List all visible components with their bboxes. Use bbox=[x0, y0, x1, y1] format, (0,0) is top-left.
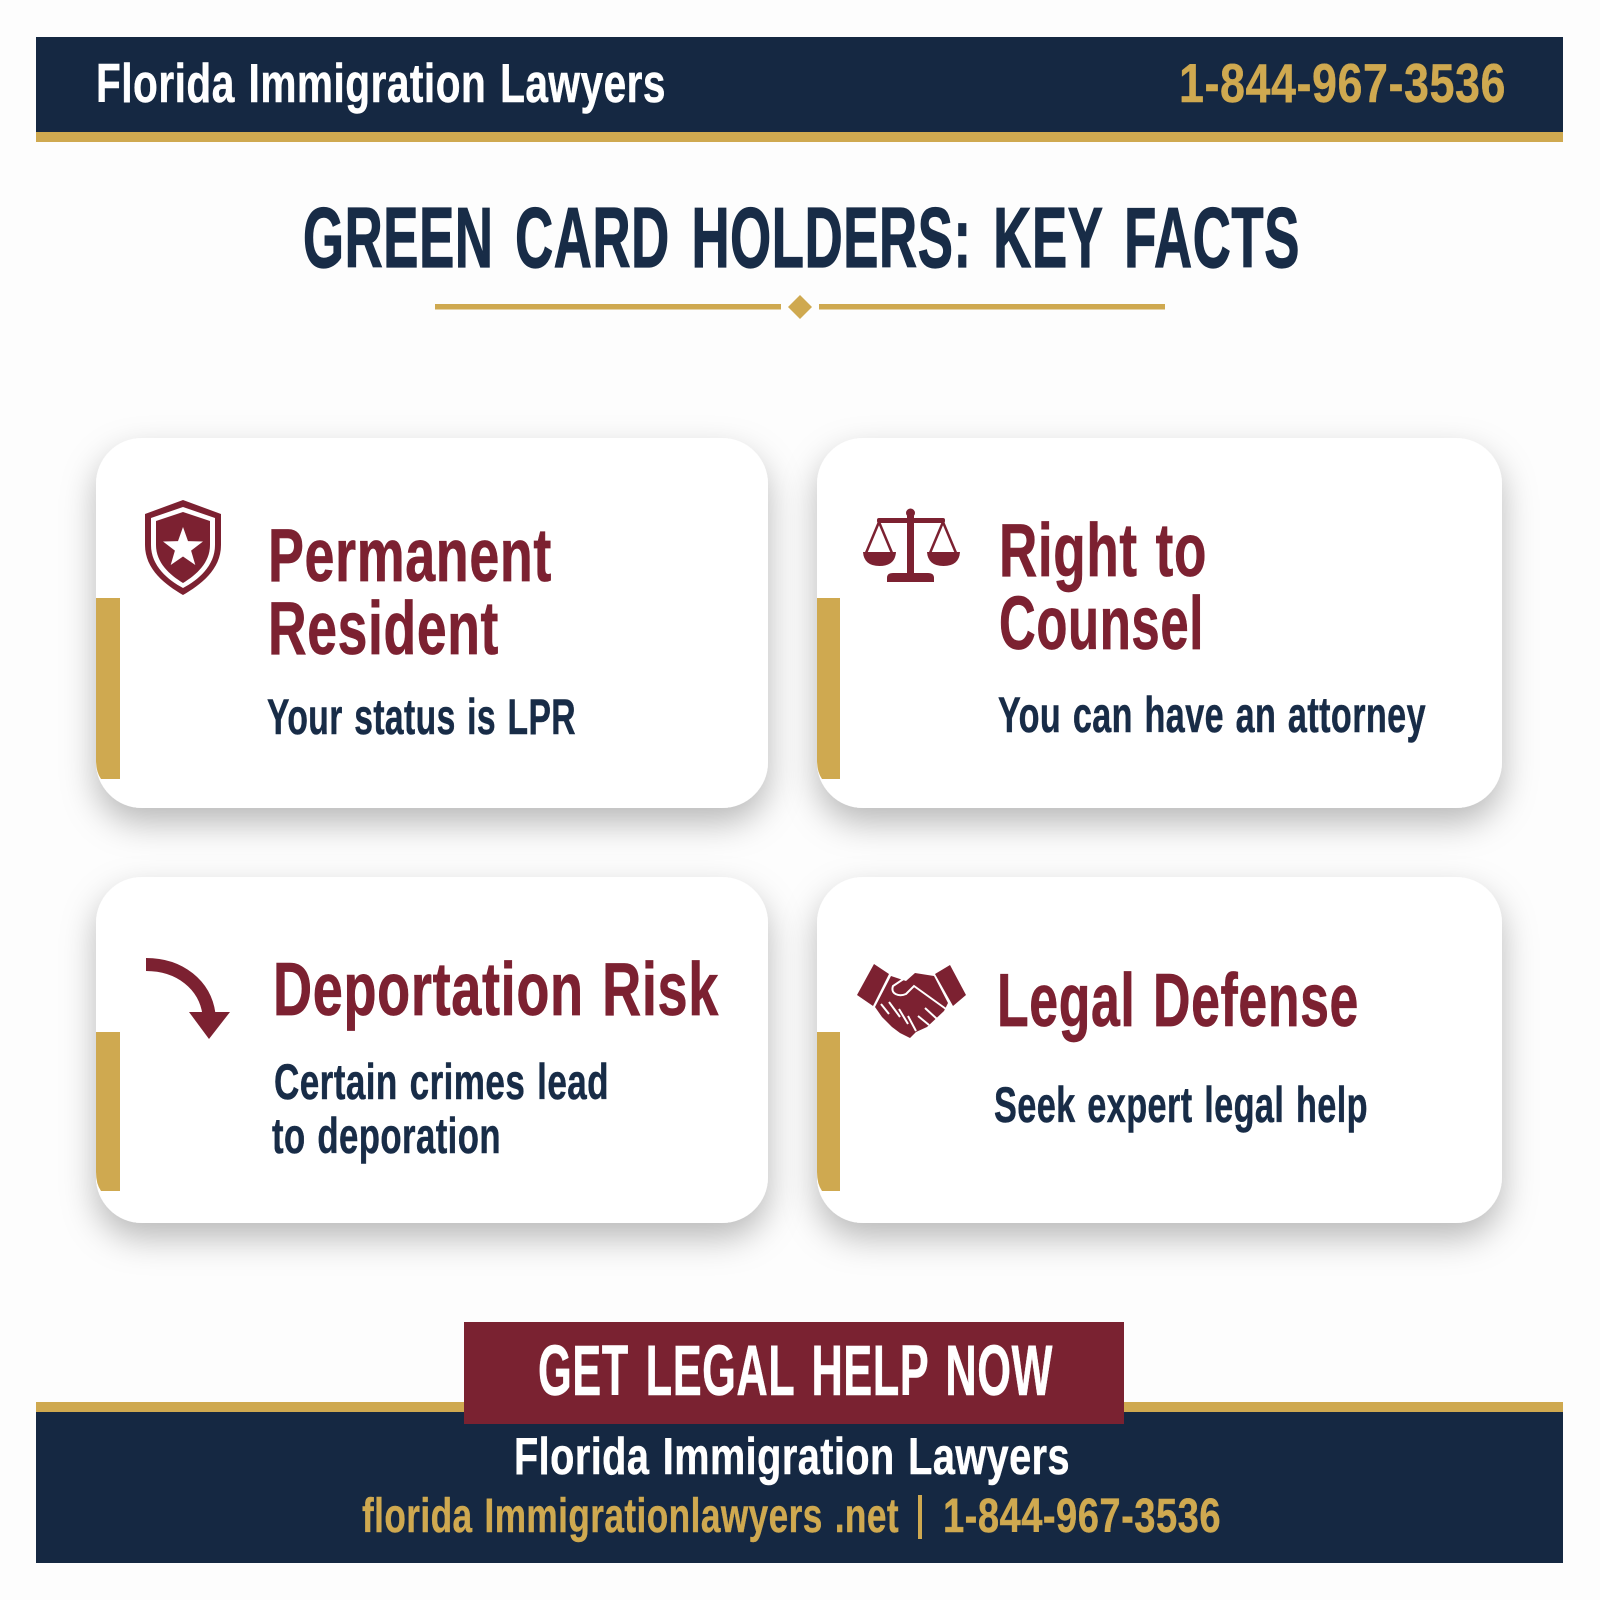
call to action bbox=[464, 1322, 1124, 1424]
footer firm name: Florida Immigration Lawyers bbox=[514, 1428, 1070, 1486]
header banner bbox=[36, 37, 1563, 142]
description: Seek expert legal help bbox=[994, 1077, 1368, 1133]
description: Your status is LPR bbox=[267, 689, 576, 745]
panel: permanent resident bbox=[96, 438, 768, 808]
panel: right to counsel bbox=[817, 438, 1502, 808]
footer banner bbox=[36, 1402, 1563, 1563]
description: to deporation bbox=[272, 1108, 501, 1164]
description: Certain crimes lead bbox=[274, 1054, 609, 1110]
firm name: Florida Immigration Lawyers bbox=[96, 52, 666, 114]
icon: scales of justice bbox=[863, 508, 960, 582]
heading: Deportation Risk bbox=[273, 947, 719, 1031]
heading: Legal Defense bbox=[997, 958, 1359, 1042]
heading: Permanent bbox=[268, 513, 552, 597]
heading: Right to bbox=[999, 508, 1207, 592]
panel: legal defense bbox=[817, 877, 1502, 1223]
title divider bbox=[435, 295, 1165, 319]
heading: Counsel bbox=[999, 581, 1204, 665]
panel: deportation risk bbox=[96, 877, 768, 1223]
icon: handshake bbox=[857, 964, 966, 1038]
footer phone: 1-844-967-3536 bbox=[943, 1490, 1221, 1543]
call to action: GET LEGAL HELP NOW bbox=[538, 1332, 1053, 1411]
website: florida Immigrationlawyers .net bbox=[362, 1490, 899, 1543]
heading: Resident bbox=[268, 586, 499, 670]
icon: curved arrow bbox=[146, 964, 230, 1039]
icon: shield with star bbox=[145, 500, 221, 595]
phone number: 1-844-967-3536 bbox=[1179, 52, 1506, 114]
